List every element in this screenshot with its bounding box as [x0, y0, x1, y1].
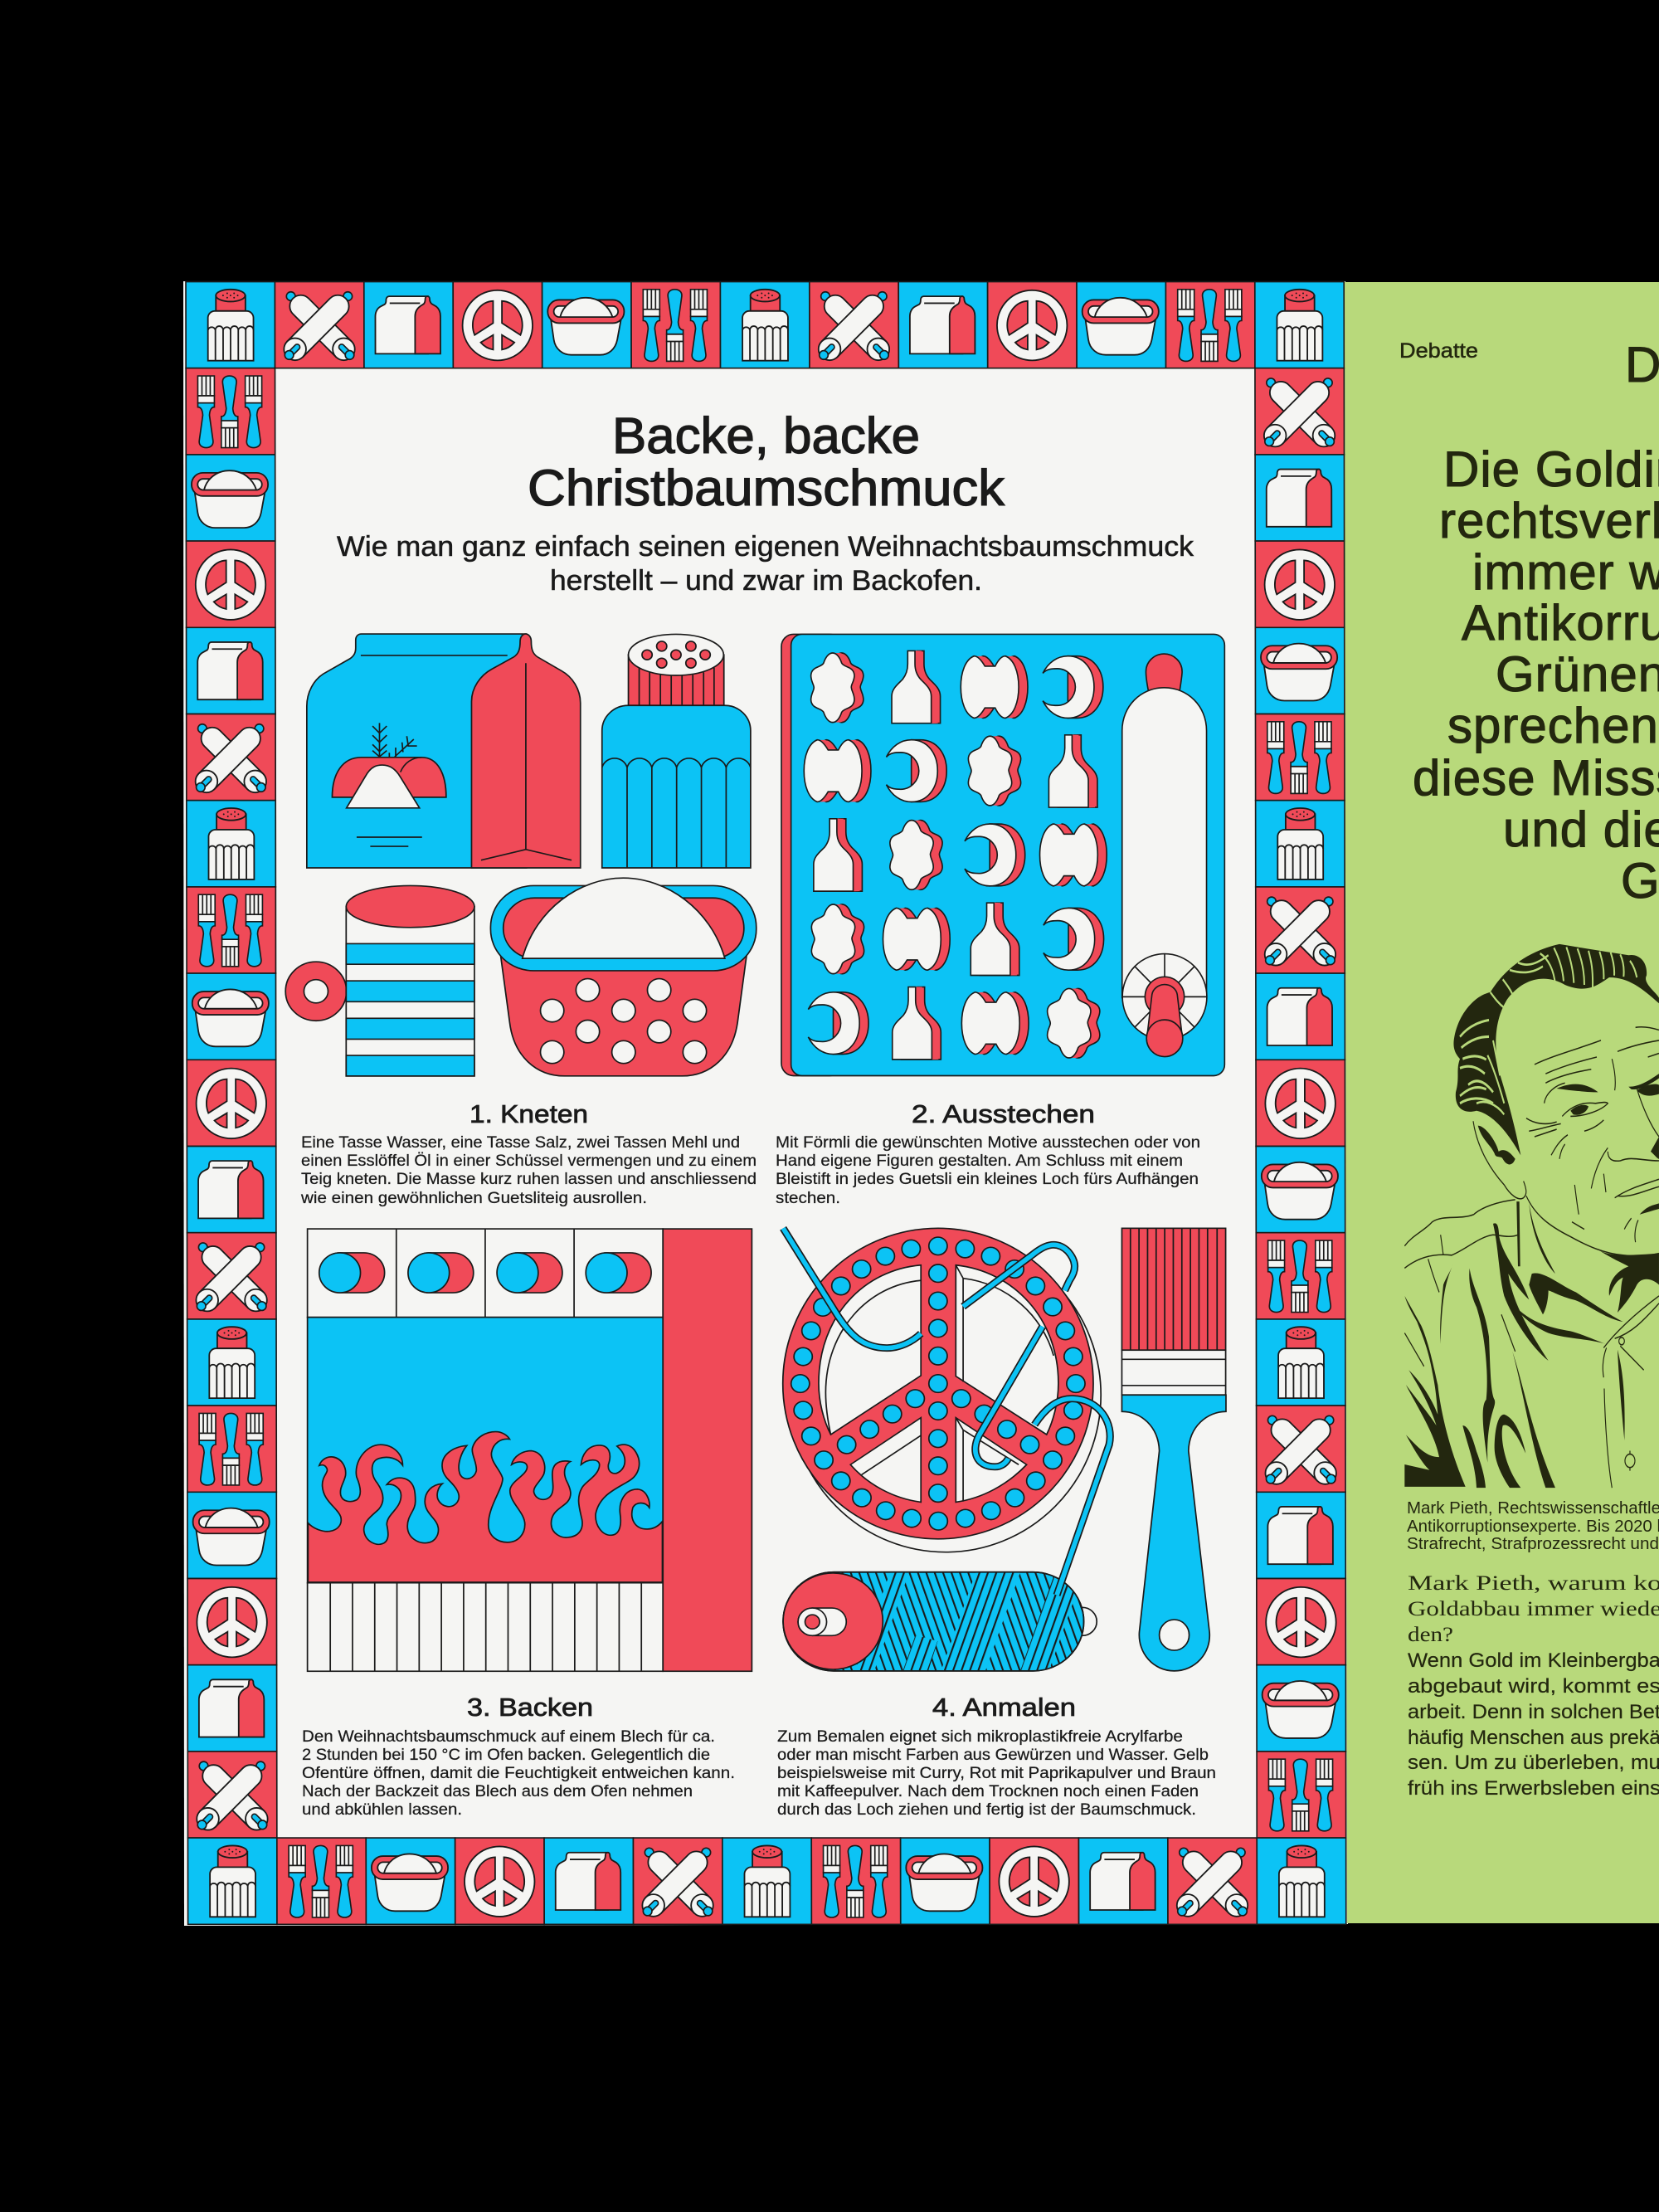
bottom row tile: brushes: [811, 1838, 901, 1924]
interview answer: [1408, 1649, 1659, 1800]
right column tile: peace sign: [1257, 1578, 1345, 1665]
left column tile: bowl: [187, 973, 276, 1060]
debate page heading: rechtsverl: [1439, 493, 1659, 548]
portrait caption: Antikorruptionsexperte. Bis 2020 l: [1407, 1518, 1659, 1536]
right column tile: bowl: [1257, 1665, 1346, 1752]
heading: step 1: 1. Kneten: [469, 1099, 588, 1128]
right column tile: rolling pins: [1257, 1406, 1345, 1492]
top row tile: flour bag: [898, 282, 988, 368]
illustration: kneading ingredients: [285, 634, 757, 1076]
interview answer: Wenn Gold im Kleinbergba: [1408, 1649, 1659, 1672]
right column tile: brushes: [1256, 1233, 1345, 1319]
text: step 1: einen Esslöffel Öl in einer Schüssel vermengen und zu einem: [301, 1152, 757, 1170]
subtitle: herstellt – und zwar im Backofen.: [550, 565, 982, 597]
heading: step 2: 2. Ausstechen: [912, 1099, 1095, 1128]
left column tile: bowl: [186, 455, 275, 541]
bottom row tile: shaker: [187, 1838, 277, 1924]
thread: [783, 1228, 1110, 1595]
left column tile: shaker: [187, 801, 275, 887]
text: step 2: Mit Förmli die gewünschten Motive ausstechen oder von: [776, 1134, 1200, 1152]
interview question: Mark Pieth, warum ko: [1408, 1572, 1659, 1595]
hair: [1453, 944, 1659, 1155]
text: step 4: [777, 1728, 1216, 1819]
title: Backe, backe: [612, 407, 920, 464]
right column tile: shaker: [1256, 1319, 1345, 1406]
right column tile: bowl: [1255, 627, 1345, 714]
panel: green debate page: [1345, 282, 1659, 1923]
text: step 1: wie einen gewöhnlichen Guetsliteig ausrollen.: [300, 1190, 647, 1207]
text: step 2: [776, 1134, 1200, 1207]
text: step 3: Den Weihnachtsbaumschmuck auf einem Blech für ca.: [302, 1728, 715, 1746]
left column tile: shaker: [187, 1319, 276, 1406]
top row tile: rolling pins: [810, 282, 898, 368]
bottom row tile: flour bag: [1078, 1838, 1168, 1924]
right column tile: shaker: [1256, 801, 1345, 887]
text: step 4: oder man mischt Farben aus Gewürzen und Wasser. Gelb: [777, 1747, 1209, 1764]
text: step 3: Nach der Backzeit das Blech aus dem Ofen nehmen: [302, 1783, 693, 1800]
subtitle: [337, 531, 1194, 597]
icon: flour bag: [307, 634, 581, 868]
portrait caption: [1407, 1499, 1659, 1553]
subtitle: Wie man ganz einfach seinen eigenen Weihnachtsbaumschmuck: [337, 531, 1194, 563]
left column tile: bowl: [187, 1492, 276, 1578]
top row tile: shaker: [186, 282, 275, 368]
hair highlights: [1460, 947, 1637, 1114]
portrait caption: Mark Pieth, Rechtswissenschaftle: [1407, 1499, 1659, 1518]
right column tile: peace sign: [1256, 1060, 1345, 1146]
text: step 4: Zum Bemalen eignet sich mikroplastikfreie Acrylfarbe: [777, 1728, 1183, 1746]
interview question: den?: [1408, 1624, 1453, 1646]
paint brush: [1121, 1228, 1226, 1671]
text: step 3: Ofentüre öffnen, damit die Feuchtigkeit entweichen kann.: [302, 1765, 735, 1782]
right column tile: rolling pins: [1256, 887, 1345, 973]
left column tile: brushes: [187, 887, 275, 973]
top row tile: flour bag: [364, 282, 453, 368]
bottom row tile: rolling pins: [1168, 1838, 1257, 1924]
spool of thread: [783, 1572, 1097, 1671]
left column tile: rolling pins: [187, 1233, 276, 1319]
icon: striped cup: [285, 885, 474, 1076]
interview answer: häufig Menschen aus prekä: [1408, 1727, 1659, 1749]
left column tile: flour bag: [187, 627, 275, 714]
interview answer: früh ins Erwerbsleben eins: [1408, 1777, 1659, 1800]
text: step 3: 2 Stunden bei 150 °C im Ofen backen. Gelegentlich die: [302, 1747, 710, 1764]
left column tile: flour bag: [187, 1665, 277, 1752]
portrait caption: Strafrecht, Strafprozessrecht und: [1407, 1535, 1659, 1553]
title: [528, 407, 1005, 516]
text: step 1: Eine Tasse Wasser, eine Tasse Salz, zwei Tassen Mehl und: [301, 1134, 740, 1152]
portrait: Mark Pieth: [1404, 944, 1659, 1488]
oven window and flames: [308, 1318, 663, 1583]
right column tile: rolling pins: [1255, 368, 1344, 455]
facial features: [1478, 1126, 1515, 1164]
decorative tile border: [186, 282, 1346, 1924]
text: step 2: stechen.: [776, 1190, 840, 1207]
top row tile: rolling pins: [275, 282, 364, 368]
bottom row tile: rolling pins: [633, 1838, 722, 1924]
icon: mixing bowl with dough: [490, 878, 757, 1076]
shirt folds: [1493, 1223, 1549, 1361]
bottom row tile: bowl: [366, 1838, 455, 1924]
heading: step 4: 4. Anmalen: [932, 1693, 1076, 1722]
bottom row tile: peace sign: [455, 1838, 544, 1924]
illustration: cookie cutting board: [781, 634, 1224, 1075]
top row tile: peace sign: [453, 282, 542, 368]
panel: recipe page: [183, 281, 1348, 1926]
interview answer: arbeit. Denn in solchen Bet: [1408, 1701, 1659, 1723]
right column tile: peace sign: [1255, 541, 1345, 627]
text: step 4: durch das Loch ziehen und fertig ist der Baumschmuck.: [777, 1801, 1196, 1819]
debate page heading: [1413, 337, 1659, 909]
peace sign cookie: [783, 1228, 1101, 1552]
right column tile: flour bag: [1256, 973, 1345, 1060]
icon: salt shaker: [602, 634, 751, 868]
text: step 1: [300, 1134, 757, 1207]
top row tile: bowl: [542, 282, 631, 368]
right column tile: brushes: [1257, 1752, 1346, 1838]
right column tile: brushes: [1255, 714, 1345, 801]
text: step 2: Hand eigene Figuren gestalten. Am Schluss mit einem: [776, 1152, 1183, 1170]
left column tile: peace sign: [187, 1060, 276, 1146]
interview question: Goldabbau immer wiede: [1408, 1598, 1659, 1620]
left column tile: brushes: [187, 1406, 276, 1492]
text: step 4: mit Kaffeepulver. Nach dem Trocknen noch einen Faden: [777, 1783, 1199, 1800]
cookie shapes: [804, 650, 1107, 1060]
right column tile: flour bag: [1255, 455, 1345, 541]
bottom row tile: brushes: [277, 1838, 366, 1924]
bottom row tile: flour bag: [544, 1838, 634, 1924]
left column tile: flour bag: [187, 1147, 276, 1233]
left column tile: rolling pins: [187, 714, 275, 801]
neck shadow: [1598, 1250, 1659, 1313]
illustration: painting and threading: [783, 1228, 1226, 1671]
text: step 4: beispielsweise mit Curry, Rot mit Paprikapulver und Braun: [777, 1765, 1216, 1782]
oven side panel: [663, 1229, 752, 1671]
bottom row tile: shaker: [1257, 1838, 1346, 1924]
interview answer: sen. Um zu überleben, mu: [1408, 1752, 1659, 1774]
heading: step 3: 3. Backen: [467, 1693, 593, 1722]
left column tile: peace sign: [186, 541, 275, 627]
top row tile: shaker: [1255, 282, 1344, 368]
right column tile: flour bag: [1257, 1492, 1345, 1578]
bottom row tile: peace sign: [990, 1838, 1079, 1924]
illustration: oven with flames: [308, 1229, 752, 1671]
top row tile: brushes: [631, 282, 721, 368]
title: Christbaumschmuck: [528, 460, 1005, 516]
top row tile: bowl: [1077, 282, 1166, 368]
text: step 3: [302, 1728, 735, 1819]
text: step 1: Teig kneten. Die Masse kurz ruhen lassen und anschliessend: [301, 1171, 757, 1188]
bottom row tile: bowl: [901, 1838, 990, 1924]
oven knobs panel: [308, 1229, 663, 1318]
right column tile: bowl: [1256, 1147, 1345, 1233]
bottom row tile: shaker: [722, 1838, 811, 1924]
oven drawer grid: [308, 1583, 663, 1671]
top row tile: brushes: [1165, 282, 1255, 368]
board: [781, 634, 1224, 1075]
interview answer: abgebaut wird, kommt es: [1408, 1675, 1659, 1698]
section label: Debatte: Debatte: [1399, 339, 1478, 363]
top row tile: peace sign: [988, 282, 1077, 368]
top row tile: shaker: [720, 282, 810, 368]
debate page heading: sprechen: [1447, 698, 1659, 753]
left column tile: peace sign: [187, 1578, 277, 1665]
rolling pin: [1122, 654, 1207, 1057]
left column tile: brushes: [186, 368, 275, 455]
face lines: [1404, 1027, 1659, 1488]
left column tile: rolling pins: [187, 1752, 277, 1838]
text: step 3: und abkühlen lassen.: [302, 1801, 462, 1819]
text: step 2: Bleistift in jedes Guetsli ein kleines Loch fürs Aufhängen: [776, 1171, 1199, 1188]
interview question: [1408, 1572, 1659, 1646]
